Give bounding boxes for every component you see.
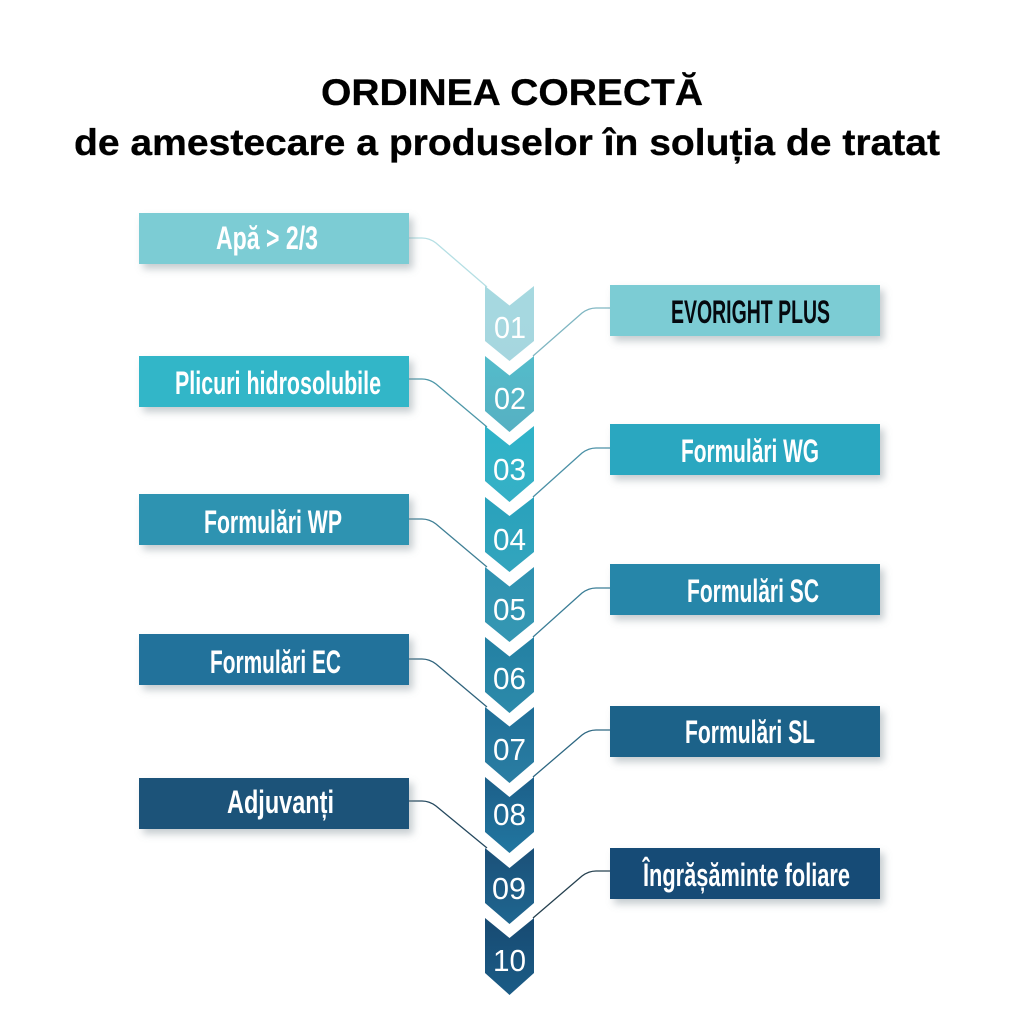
chevron 01 xyxy=(485,286,534,361)
chevron 02 xyxy=(485,356,534,432)
label: Apă > 2/3 xyxy=(139,213,409,264)
label: Adjuvanți: Adjuvanți xyxy=(227,784,334,820)
chevron 04 xyxy=(485,497,534,572)
connector: 01 left xyxy=(409,238,487,287)
label: Formulări WG: Formulări WG xyxy=(681,433,819,469)
connector: 03 left xyxy=(409,379,487,427)
connector: 07 left xyxy=(409,659,487,707)
connector: 04 right xyxy=(533,448,610,497)
label: Plicuri hidrosolubile: Plicuri hidrosolubile xyxy=(175,365,381,401)
label: Formulări WP: Formulări WP xyxy=(204,504,342,540)
chevron 05: 05 xyxy=(493,592,526,627)
chevron 09: 09 xyxy=(492,871,526,906)
chevron 08 xyxy=(485,777,534,853)
chevron 01: 01 xyxy=(494,310,526,345)
connector: 05 left xyxy=(409,519,487,567)
chevron 03: 03 xyxy=(493,452,526,487)
label: Adjuvanți xyxy=(139,778,409,829)
title xyxy=(74,72,940,164)
chevron 09 xyxy=(485,848,534,924)
connector: 02 right xyxy=(533,308,610,356)
label: Plicuri hidrosolubile xyxy=(139,356,409,407)
connector: 09 left xyxy=(409,801,487,848)
title: ORDINEA CORECTĂ xyxy=(321,72,703,113)
chevron 10 xyxy=(485,918,534,995)
label: Formulări EC xyxy=(139,634,409,685)
label: Îngrășăminte foliare: Îngrășăminte foliare xyxy=(642,857,850,893)
chevron 08: 08 xyxy=(493,797,526,832)
connector: 06 right xyxy=(533,588,610,637)
label: Formulări SC: Formulări SC xyxy=(687,573,819,609)
chevron 04: 04 xyxy=(493,522,526,557)
chevron 06: 06 xyxy=(493,661,526,696)
title: de amestecare a produselor în soluția de tratat xyxy=(74,122,940,164)
chevron 05 xyxy=(485,567,534,642)
chevron 06 xyxy=(485,637,534,713)
label: Formulări SL xyxy=(610,706,880,757)
label: EVORIGHT PLUS xyxy=(610,285,880,336)
label: Apă > 2/3: Apă > 2/3 xyxy=(216,220,318,256)
label: Îngrășăminte foliare xyxy=(610,848,880,899)
chevron 10: 10 xyxy=(493,943,526,978)
connector: 08 right xyxy=(533,730,610,777)
label: EVORIGHT PLUS: EVORIGHT PLUS xyxy=(671,294,830,330)
chevron 07: 07 xyxy=(493,732,526,767)
chevron 07 xyxy=(485,707,534,783)
chevron 02: 02 xyxy=(494,381,526,416)
label: Formulări SL: Formulări SL xyxy=(685,714,815,750)
label: Formulări WG xyxy=(610,424,880,475)
connector: 10 right xyxy=(533,871,610,918)
label: Formulări WP xyxy=(139,494,409,545)
label: Formulări EC: Formulări EC xyxy=(210,644,341,680)
chevron 03 xyxy=(485,426,534,502)
label: Formulări SC xyxy=(610,564,880,615)
